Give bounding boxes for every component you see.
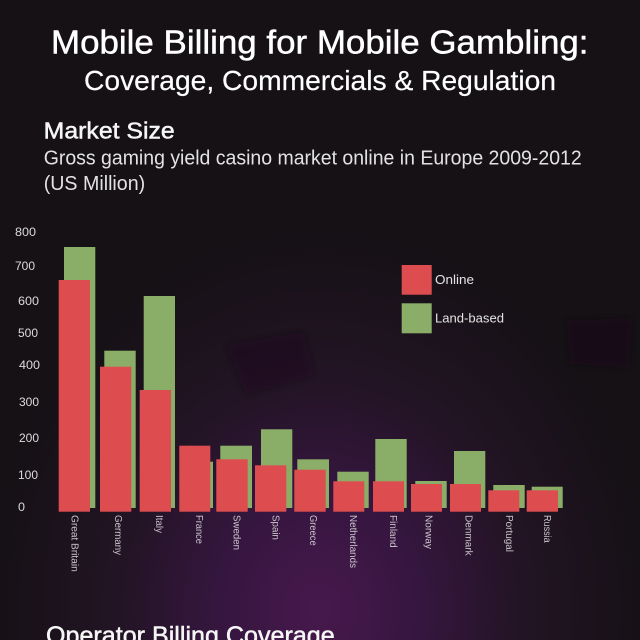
title: Mobile Billing for Mobile Gambling: xyxy=(51,24,588,60)
online bars xyxy=(59,280,558,512)
title xyxy=(51,24,588,96)
country labels: France xyxy=(193,515,205,544)
legend item: online: Online xyxy=(435,272,474,287)
country labels: Norway xyxy=(422,515,434,550)
y axis labels: 700 xyxy=(15,261,35,273)
y axis labels: 300 xyxy=(19,397,39,409)
country labels: Germany xyxy=(112,515,124,556)
title: Coverage, Commercials & Regulation xyxy=(84,65,556,96)
country labels xyxy=(68,515,553,572)
chart description: (US Million) xyxy=(44,173,145,195)
country labels: Finland xyxy=(387,515,399,548)
chart description: Gross gaming yield casino market online in Europe 2009-2012 xyxy=(44,148,582,170)
country labels: Sweden xyxy=(230,515,242,550)
country labels: Denmark xyxy=(462,515,474,556)
y axis labels: 800 xyxy=(15,227,36,239)
section heading: market size: Market Size xyxy=(44,117,175,143)
y axis labels: 400 xyxy=(19,360,40,372)
y axis labels: 600 xyxy=(18,296,39,308)
chart description xyxy=(44,148,582,195)
country labels: Russia xyxy=(541,515,553,543)
y axis labels: 200 xyxy=(19,433,39,445)
country labels: Netherlands xyxy=(347,515,359,568)
y axis labels xyxy=(15,227,40,514)
country labels: Portugal xyxy=(503,515,515,552)
country labels: Spain xyxy=(269,515,281,540)
land-based bars xyxy=(64,247,563,508)
legend xyxy=(402,265,504,333)
country labels: Greece xyxy=(307,515,319,546)
bar chart xyxy=(15,227,563,572)
legend item: land-based: Land-based xyxy=(435,310,504,325)
y axis labels: 100 xyxy=(18,470,38,482)
country labels: Great Britain xyxy=(68,515,80,572)
y axis labels: 500 xyxy=(18,328,38,340)
y axis labels: 0 xyxy=(18,502,25,514)
country labels: Italy xyxy=(153,515,165,534)
